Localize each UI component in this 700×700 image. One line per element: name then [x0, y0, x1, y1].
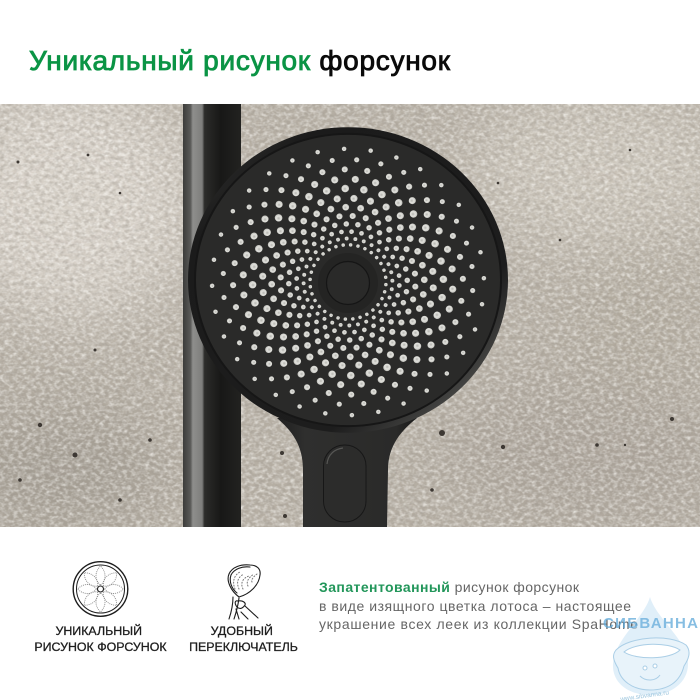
brand name: СИБВАННА: [603, 615, 698, 632]
sliding bar: [183, 104, 241, 527]
description text: в виде изящного цветка лотоса – настоящее: [319, 598, 631, 614]
shower head: [188, 127, 508, 433]
description text: украшение всех леек из коллекции SpaHome: [319, 616, 638, 632]
label: unique nozzle pattern: РИСУНОК ФОРСУНОК: [34, 640, 167, 654]
nozzle pattern: [201, 138, 495, 426]
description text: [319, 579, 638, 632]
title: Уникальный рисунок форсунок: [29, 45, 451, 76]
icon: hand switching shower head: [228, 565, 260, 619]
concrete wall background: [0, 104, 700, 527]
spray switch button: [324, 445, 366, 522]
label: convenient switch: ПЕРЕКЛЮЧАТЕЛЬ: [189, 640, 298, 654]
bath: [614, 638, 689, 690]
water drop: [613, 597, 688, 695]
label: convenient switch: УДОБНЫЙ: [211, 623, 273, 638]
photo: shower head on concrete wall: [0, 80, 700, 530]
watermark: Sibvanna logo: [603, 597, 698, 700]
icon: lotus nozzle pattern: [73, 562, 128, 616]
description text: Запатентованный рисунок форсунок: [319, 579, 580, 595]
label: unique nozzle pattern: УНИКАЛЬНЫЙ: [55, 623, 142, 638]
handle: [277, 418, 417, 527]
center button: [318, 253, 378, 313]
